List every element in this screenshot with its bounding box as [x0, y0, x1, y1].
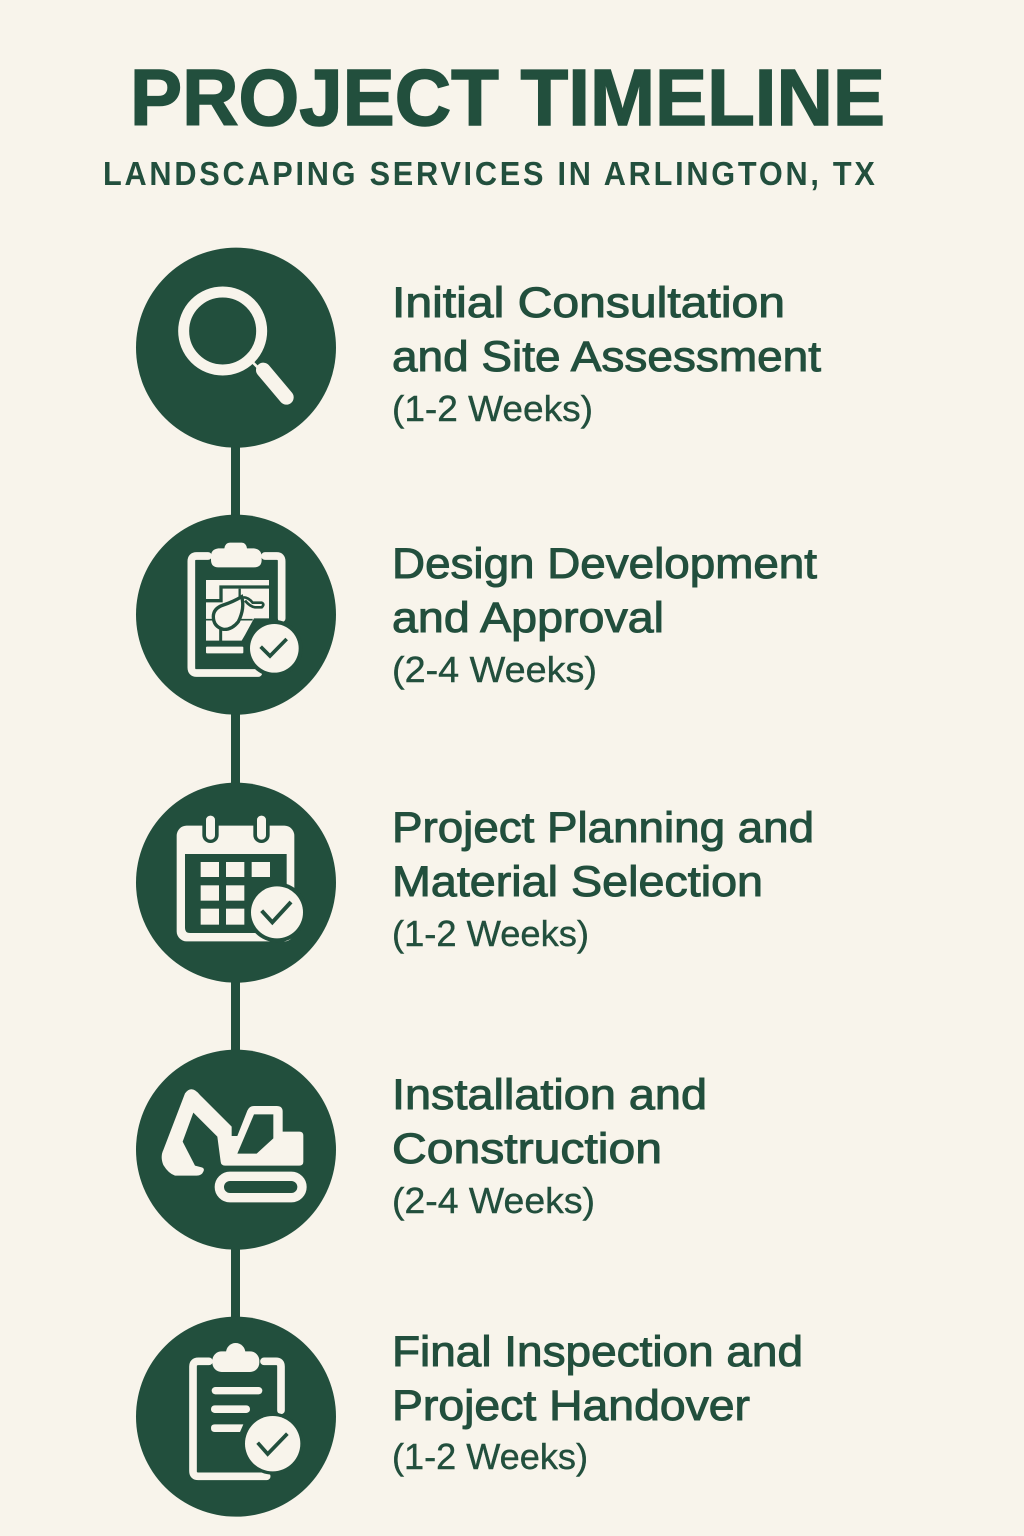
step 4 text: Installation and [392, 1071, 707, 1119]
connector: step 2 to 3 [231, 708, 240, 788]
subtitle: LANDSCAPING SERVICES IN ARLINGTON, TX [103, 155, 875, 192]
step 2 text: Design Development [392, 540, 817, 588]
step 1 text: and Site Assessment [392, 333, 821, 381]
step 2 icon: design plan clipboard with check [136, 515, 336, 715]
step 5 text: Final Inspection and [392, 1328, 803, 1376]
step 2 text: (2-4 Weeks) [392, 649, 597, 690]
step 2 text: and Approval [392, 594, 664, 642]
step 1 text [392, 279, 821, 429]
step 1 text: Initial Consultation [392, 279, 785, 327]
step 5 text [392, 1328, 803, 1477]
step 3 text: Project Planning and [392, 804, 814, 852]
step 1 icon: magnifying glass [136, 248, 336, 448]
step 5 icon: checklist clipboard with check [136, 1317, 336, 1517]
step 5 text: Project Handover [392, 1382, 750, 1430]
title: PROJECT TIMELINE [130, 53, 885, 142]
step 1 text: (1-2 Weeks) [392, 388, 593, 429]
step 4 text: Construction [392, 1125, 662, 1173]
step 5 text: (1-2 Weeks) [392, 1436, 588, 1477]
step 4 text [392, 1071, 707, 1221]
connector: step 1 to 2 [231, 440, 240, 520]
step 4 icon: excavator [136, 1050, 336, 1250]
step 2 text [392, 540, 817, 690]
connector: step 3 to 4 [231, 975, 240, 1055]
connector: step 4 to 5 [231, 1243, 240, 1323]
step 3 text: Material Selection [392, 858, 763, 906]
step 3 icon: calendar with check [136, 783, 336, 983]
step 4 text: (2-4 Weeks) [392, 1180, 595, 1221]
step 3 text [392, 804, 814, 954]
step 3 text: (1-2 Weeks) [392, 913, 589, 954]
